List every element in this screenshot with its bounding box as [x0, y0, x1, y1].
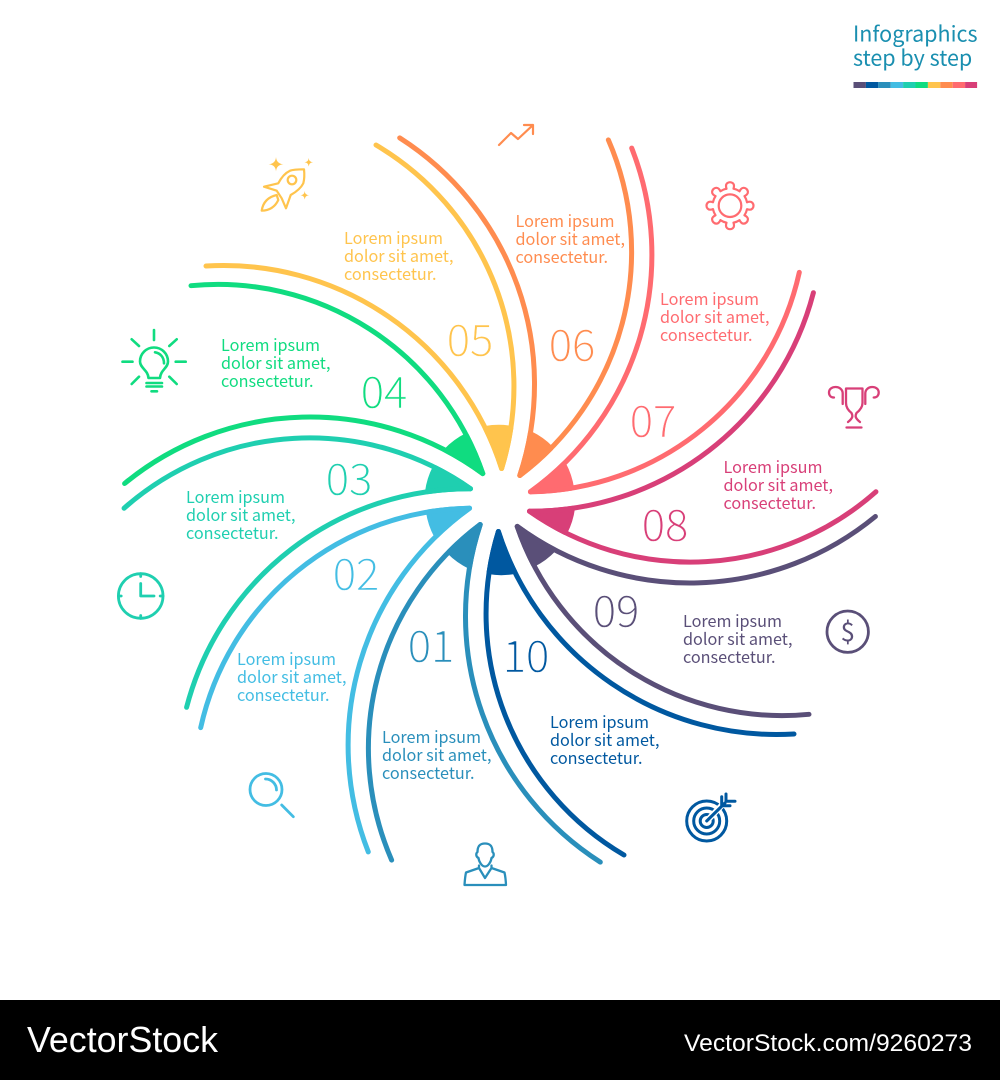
icon: growth arrow: [499, 125, 533, 145]
text block 06: Lorem ipsum: [516, 208, 614, 232]
header: Infographics step by step: Infographics: [853, 18, 978, 48]
text block 04: [221, 332, 331, 392]
step 01 arcs and wedge: [280, 517, 719, 960]
number 07: 07: [630, 387, 676, 450]
number 01: 01: [408, 612, 454, 675]
text block 09: dolor sit amet,: [683, 626, 793, 650]
step 07 arcs and wedge: [439, 111, 842, 504]
text block 08: consectetur.: [724, 490, 816, 514]
text block 04: dolor sit amet,: [221, 350, 331, 374]
text block 06: consectetur.: [516, 244, 608, 268]
footer bar: VectorStock.com/9260273: [684, 1030, 972, 1057]
icon: light bulb: [122, 330, 186, 391]
text block 10: consectetur.: [550, 745, 643, 769]
text block 02: Lorem ipsum: [237, 646, 336, 670]
icon: person: [464, 844, 506, 885]
step 10 arcs and wedge: [486, 532, 794, 855]
text block 01: Lorem ipsum: [382, 724, 481, 748]
number 09: 09: [593, 577, 639, 640]
footer bar: VectorStock: [27, 1019, 219, 1060]
text block 10: [550, 709, 660, 769]
text block 03: [186, 484, 296, 544]
icon: target with arrow: [687, 794, 735, 841]
text block 01: [382, 724, 492, 784]
icon: clock: [118, 574, 163, 618]
text block 03: consectetur.: [186, 520, 279, 544]
header: Infographics step by step: step by step: [853, 42, 972, 72]
step 03 arcs and wedge: [72, 377, 474, 770]
icon: magnifier: [250, 774, 293, 817]
step 09 arcs and wedge: [507, 353, 947, 795]
header: Infographics step by step: [853, 18, 978, 88]
text block 10: dolor sit amet,: [550, 727, 660, 751]
text block 07: Lorem ipsum: [660, 286, 759, 310]
number 04: 04: [361, 358, 407, 421]
step 04 arcs and wedge: [53, 205, 493, 647]
number 10: 10: [503, 622, 549, 685]
step 08 arcs and wedge: [526, 230, 928, 623]
icon: gear: [706, 182, 754, 229]
text block 08: Lorem ipsum: [724, 454, 822, 478]
text block 04: consectetur.: [221, 368, 314, 392]
icon: dollar coin: [827, 611, 868, 652]
icon: rocket: [262, 157, 313, 211]
text block 05: dolor sit amet,: [344, 243, 454, 267]
text block 07: [660, 286, 770, 346]
text block 08: [724, 454, 833, 514]
text block 08: dolor sit amet,: [724, 472, 833, 496]
number 05: 05: [447, 306, 493, 369]
step 06 arcs and wedge: [281, 40, 720, 483]
text block 07: dolor sit amet,: [660, 304, 770, 328]
text block 03: Lorem ipsum: [186, 484, 285, 508]
text block 10: Lorem ipsum: [550, 709, 649, 733]
text block 04: Lorem ipsum: [221, 332, 320, 356]
footer bar: [0, 1000, 1000, 1080]
text block 02: consectetur.: [237, 682, 330, 706]
text block 06: [516, 208, 625, 268]
number 02: 02: [333, 540, 379, 603]
step 02 arcs and wedge: [158, 496, 561, 889]
number 08: 08: [642, 491, 688, 554]
text block 09: consectetur.: [683, 644, 776, 668]
text block 06: dolor sit amet,: [516, 226, 625, 250]
text block 09: Lorem ipsum: [683, 608, 782, 632]
text block 01: dolor sit amet,: [382, 742, 492, 766]
text block 03: dolor sit amet,: [186, 502, 296, 526]
text block 05: consectetur.: [344, 261, 437, 285]
text block 09: [683, 608, 793, 668]
icon: dollar coin: $: [840, 612, 855, 649]
text block 01: consectetur.: [382, 760, 475, 784]
number 06: 06: [549, 311, 595, 374]
text block 05: [344, 225, 454, 285]
text block 05: Lorem ipsum: [344, 225, 443, 249]
step 05 arcs and wedge: [206, 145, 514, 468]
text block 07: consectetur.: [660, 322, 753, 346]
text block 02: [237, 646, 347, 706]
icon: trophy: [829, 387, 879, 428]
number 03: 03: [326, 445, 372, 508]
text block 02: dolor sit amet,: [237, 664, 347, 688]
